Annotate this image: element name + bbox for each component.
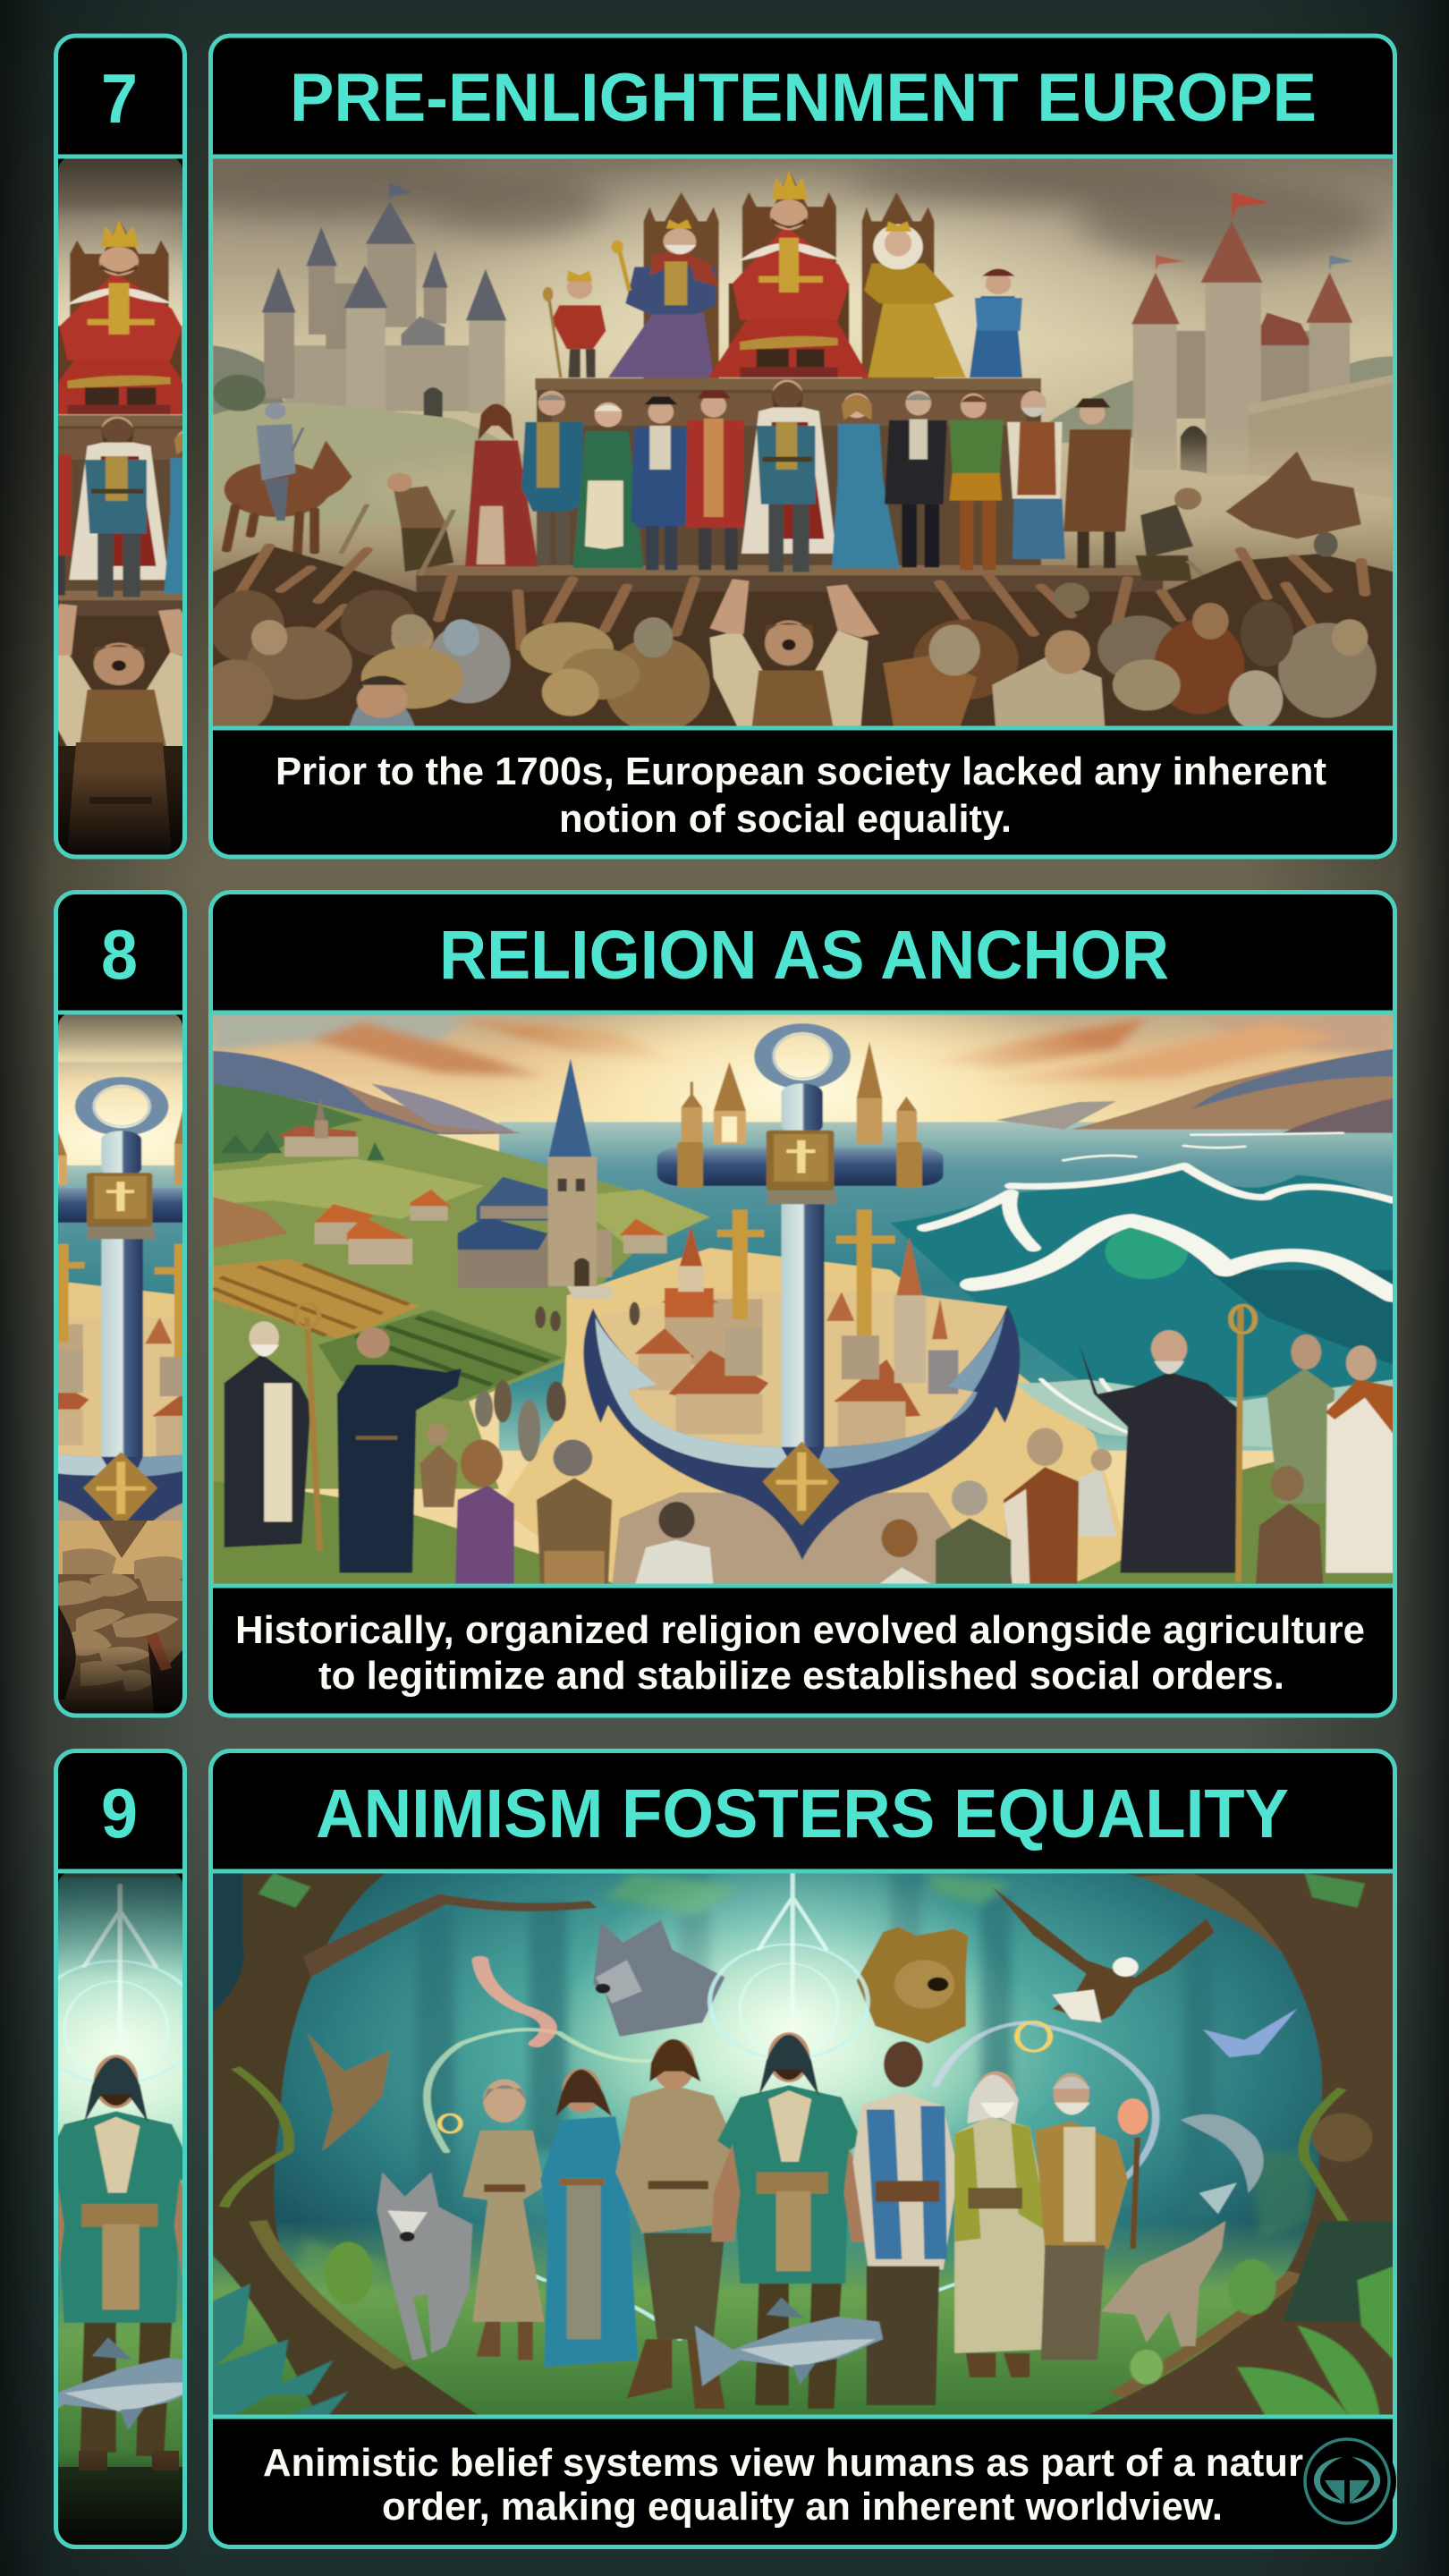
caption text [235,1608,1365,1698]
header divider line [55,154,1394,159]
icon: circular watermark logo [1298,2432,1396,2530]
caption text: order, making equality an inherent worldview. [382,2485,1223,2529]
caption text [275,750,1326,841]
main card frame [211,893,1395,1716]
heading: religion as anchor: RELIGION AS ANCHOR [439,917,1169,994]
number card frame [55,893,184,1716]
caption text: notion of social equality. [559,797,1012,841]
main card frame [211,36,1395,857]
number strip image: anchor close-up on cobblestones [58,1014,182,1714]
number card frame [55,1751,184,2547]
heading: pre-enlightenment europe: PRE-ENLIGHTENMENT EUROPE [290,60,1317,136]
caption divider line [211,1583,1394,1589]
number 9: 9 [101,1774,138,1852]
header divider line [55,1869,1394,1873]
caption text: Prior to the 1700s, European society lacked any inherent [275,750,1326,793]
caption divider line [211,2415,1394,2419]
caption text [263,2441,1303,2529]
illustration: anchor with churches between farmland and stormy sea [206,981,1402,1591]
number strip image: central figure and fish close-up [58,1873,182,2540]
number 7: 7 [101,59,138,138]
number strip image: crowned king close-up [58,159,182,855]
header divider line [55,1011,1394,1014]
illustration: people, animals and spirits in a glowing forest [206,1845,1402,2427]
number 8: 8 [101,915,138,994]
caption text: Animistic belief systems view humans as part of a natur [263,2441,1303,2485]
number card background [55,893,184,1716]
main card background [211,893,1395,1716]
main card background [211,36,1395,857]
panel: pre-enlightenment europe [0,36,1449,859]
caption text: Historically, organized religion evolved alongside agriculture [235,1608,1365,1652]
panel: religion as anchor [0,893,1402,1719]
illustration: feudal hierarchy with crown, nobles and peasants [213,159,1393,726]
panel: animism fosters equality [0,1751,1402,2551]
number card frame [55,36,184,857]
number card background [55,36,184,857]
caption divider line [211,726,1394,730]
number card background [55,1751,184,2547]
caption text: to legitimize and stabilize established social orders. [318,1654,1284,1698]
main card frame [211,1751,1395,2547]
main card background [211,1751,1395,2547]
heading: animism fosters equality: ANIMISM FOSTERS EQUALITY [316,1775,1289,1852]
